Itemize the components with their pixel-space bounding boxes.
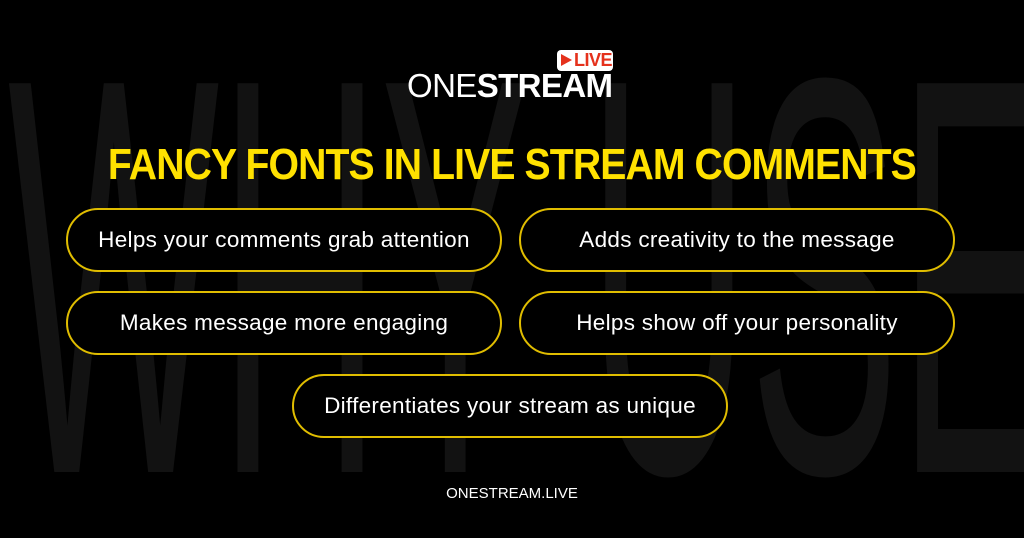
logo badge: LIVE: LIVE <box>574 50 612 70</box>
pill 2 <box>519 208 955 272</box>
pill 1: Helps your comments grab attention <box>98 227 470 252</box>
pill 3 <box>66 291 502 355</box>
pill 3: Makes message more engaging <box>120 310 448 335</box>
title: FANCY FONTS IN LIVE STREAM COMMENTS <box>108 140 916 189</box>
footer url: ONESTREAM.LIVE <box>446 485 578 502</box>
pill 2: Adds creativity to the message <box>579 227 895 252</box>
pill 4: Helps show off your personality <box>576 310 898 335</box>
logo <box>407 50 613 104</box>
pill 1 <box>66 208 502 272</box>
logo wordmark: ONESTREAM <box>407 67 612 104</box>
logo badge: LIVE <box>557 50 613 71</box>
pill 4 <box>519 291 955 355</box>
pill 5: Differentiates your stream as unique <box>324 393 696 418</box>
pill 5 <box>292 374 728 438</box>
